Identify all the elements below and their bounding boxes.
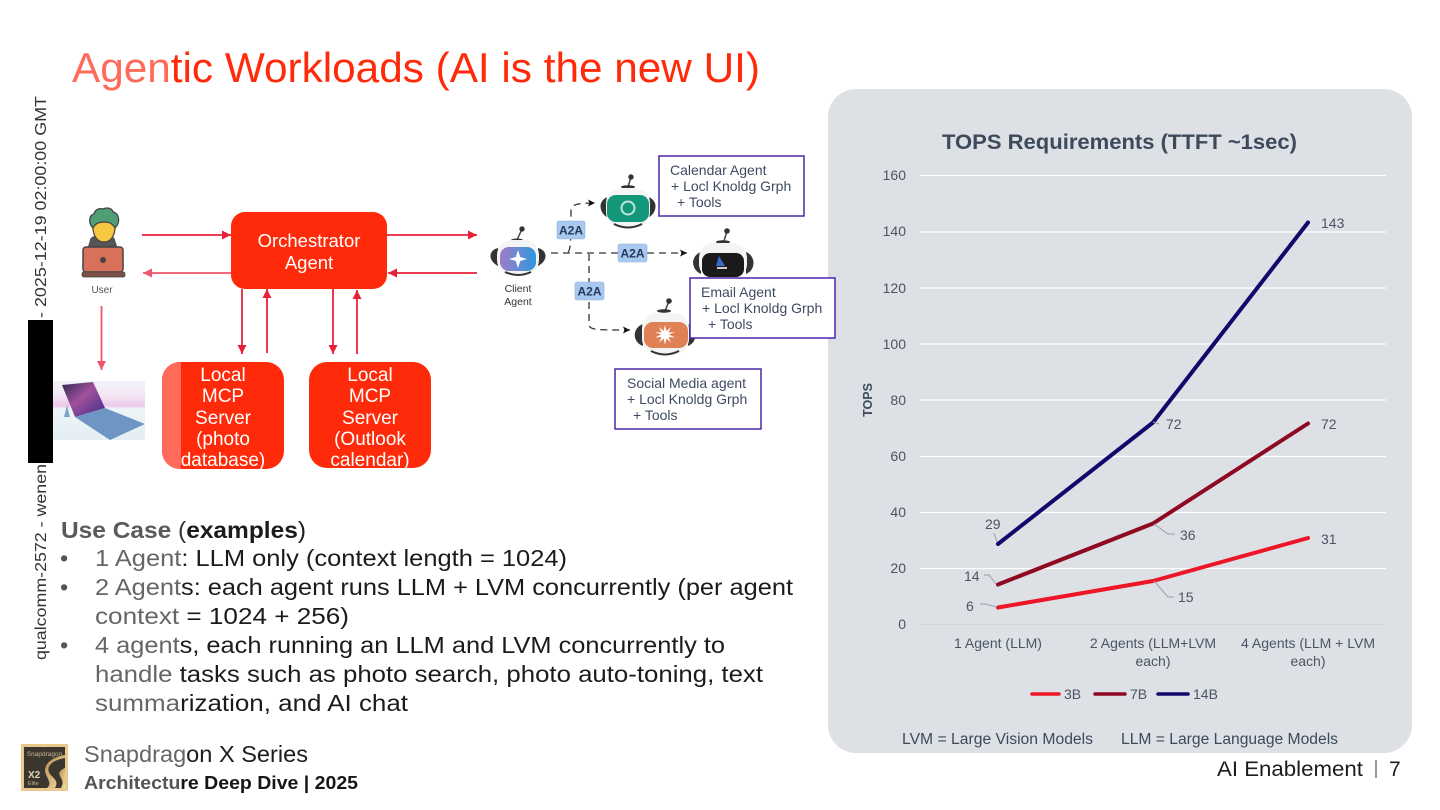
callout: social media agent	[615, 369, 761, 429]
local MCP server: photo database	[162, 362, 284, 471]
orchestrator agent box	[231, 212, 387, 289]
glossary note: LVM = Large Vision Models	[902, 731, 1093, 748]
y-axis labels: 60	[890, 448, 906, 464]
icon: calendar robot	[600, 174, 656, 228]
glossary note: LLM = Large Language Models	[1121, 731, 1338, 748]
local MCP server: photo database: Local	[200, 365, 246, 386]
text block: use case examples: 4 agent s, each running an LLM and LVM concurrently to	[95, 632, 725, 658]
y-axis title: TOPS	[861, 383, 875, 417]
title: Agentic Workloads (AI is the new UI)	[72, 44, 760, 91]
callout: calendar agent: Calendar Agent	[670, 162, 767, 178]
local MCP server: outlook calendar: (Outlook	[334, 429, 406, 450]
chart title: TOPS Requirements (TTFT ~1sec)	[942, 130, 1297, 154]
data labels: 15	[1178, 589, 1194, 605]
callout: social media agent: + Locl Knoldg Grph	[627, 391, 747, 407]
data labels: 36	[1180, 527, 1196, 543]
x-axis labels: each)	[1135, 653, 1171, 669]
local MCP server: photo database: Server	[195, 408, 252, 429]
footer section and page number: AI Enablement	[1217, 758, 1363, 781]
text block: use case examples	[60, 517, 793, 716]
x-axis labels: 1 Agent (LLM)	[954, 635, 1042, 651]
logo: Snapdragon badge	[21, 744, 68, 791]
y-axis labels: 0	[898, 616, 906, 632]
local MCP server: outlook calendar: Local	[347, 365, 393, 386]
callout: calendar agent: + Tools	[677, 194, 722, 210]
chart legend: 3B	[1064, 686, 1081, 702]
arrows: A2A dashed links	[551, 203, 687, 330]
y-axis labels: 120	[883, 280, 906, 296]
footer section and page number: 7	[1389, 758, 1401, 781]
A2A label middle: A2A	[620, 246, 645, 260]
text block: use case examples: 1 Agent : LLM only (context length = 1024)	[95, 545, 567, 571]
local MCP server: photo database: database)	[181, 450, 265, 471]
data labels: 31	[1321, 531, 1337, 547]
orchestrator agent box: Agent	[285, 252, 333, 273]
callout: calendar agent	[659, 156, 804, 216]
text block: use case examples: 2 Agent s: each agent runs LLM + LVM concurrently (per agent	[95, 574, 793, 600]
footer series name	[84, 741, 358, 793]
y-axis labels: 80	[890, 392, 906, 408]
logo: Snapdragon badge: X2	[28, 770, 41, 781]
callout: email agent	[690, 278, 835, 338]
text block: use case examples: •	[60, 574, 68, 600]
orchestrator agent box: Orchestrator	[258, 230, 360, 251]
footer series name: Architectu re Deep Dive | 2025	[84, 772, 358, 793]
local MCP server: photo database: MCP	[202, 386, 244, 407]
y-axis labels: 160	[883, 167, 906, 183]
text block: use case examples: •	[60, 545, 68, 571]
callout: social media agent: + Tools	[633, 407, 678, 423]
icon: client agent robot: Client	[505, 283, 531, 295]
data labels: 14	[964, 568, 980, 584]
data labels: 6	[966, 598, 974, 614]
x-axis labels: each)	[1290, 653, 1326, 669]
icon: user: User	[91, 285, 113, 296]
x-axis labels: 4 Agents (LLM + LVM	[1241, 635, 1375, 651]
data label leader lines	[980, 422, 1175, 607]
local MCP server: photo database: (photo	[196, 429, 250, 450]
text block: use case examples: summa rization, and AI chat	[95, 690, 409, 716]
panel: TOPS chart	[828, 89, 1412, 753]
footer series name: Snapdragon X Series	[84, 741, 308, 767]
callout: email agent: Email Agent	[701, 284, 776, 300]
data labels: 29	[985, 516, 1001, 532]
A2A label lower: A2A	[577, 284, 602, 298]
line series: 14B	[998, 222, 1308, 544]
icon: client agent robot: Agent	[504, 296, 532, 308]
x-axis labels: 2 Agents (LLM+LVM	[1090, 635, 1216, 651]
arrows: orchestrator connections	[102, 235, 477, 370]
logo: Snapdragon badge: Snapdragon	[27, 751, 63, 758]
icon: user	[82, 208, 125, 296]
y-axis labels: 140	[883, 223, 906, 239]
icon: social media robot	[635, 298, 696, 354]
y-axis labels: 100	[883, 336, 906, 352]
icon: laptop image	[53, 381, 145, 440]
vertical watermark text: upper: - 2025-12-19 02:00:00 GMT	[33, 96, 50, 318]
y-axis labels	[883, 167, 906, 632]
callout: calendar agent: + Locl Knoldg Grph	[671, 178, 791, 194]
A2A label top	[557, 221, 585, 239]
glossary note	[902, 731, 1338, 748]
panel: agent-to-agent diagram	[490, 156, 835, 429]
y-axis labels: 40	[890, 504, 906, 520]
callout: social media agent: Social Media agent	[627, 375, 746, 391]
local MCP server: outlook calendar	[309, 362, 431, 471]
data labels: 72	[1166, 416, 1182, 432]
redaction bar	[28, 320, 53, 463]
panel: orchestrator diagram	[53, 208, 477, 471]
text block: use case examples: handle tasks such as photo search, photo auto-toning, text	[95, 661, 764, 687]
local MCP server: outlook calendar: Server	[342, 408, 399, 429]
icon: email robot	[693, 228, 754, 279]
data labels	[964, 215, 1345, 614]
text block: use case examples: •	[60, 632, 68, 658]
chart legend: 14B	[1193, 686, 1218, 702]
logo: Snapdragon badge: Elite	[28, 781, 39, 787]
A2A label lower	[575, 282, 604, 300]
callout: email agent: + Locl Knoldg Grph	[702, 300, 822, 316]
chart legend	[1032, 686, 1218, 702]
A2A label top: A2A	[559, 224, 583, 238]
text block: use case examples: context = 1024 + 256)	[95, 603, 349, 629]
local MCP server: outlook calendar: MCP	[349, 386, 391, 407]
callout: email agent: + Tools	[708, 316, 752, 332]
local MCP server: outlook calendar: calendar)	[330, 450, 410, 471]
chart legend: 7B	[1130, 686, 1147, 702]
icon: client agent robot	[490, 226, 546, 308]
x-axis labels	[954, 635, 1375, 669]
data labels: 143	[1321, 215, 1345, 231]
text block: use case examples: Use Case (examples)	[61, 517, 306, 543]
A2A label middle	[618, 244, 647, 262]
line series: 7B	[998, 424, 1308, 584]
vertical watermark text: lower: qualcomm-2572 - wenen	[33, 464, 50, 660]
line series: 3B	[998, 538, 1308, 608]
y-axis labels: 20	[890, 560, 906, 576]
data labels: 72	[1321, 416, 1337, 432]
